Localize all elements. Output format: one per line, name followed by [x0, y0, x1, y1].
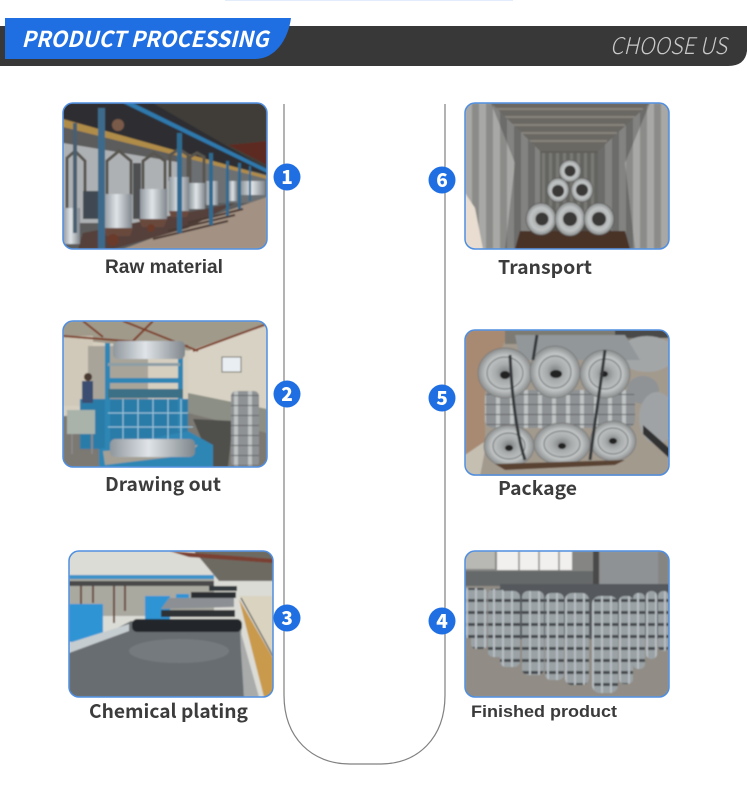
- header banner: [0, 18, 747, 66]
- label: chemical plating: Chemical plating: [89, 697, 249, 724]
- step badge 2: 2: [281, 380, 293, 407]
- step badge 4: [428, 607, 456, 634]
- step badge 3: 3: [281, 604, 293, 631]
- dark header bar: [0, 26, 747, 66]
- plating bath: [69, 621, 244, 697]
- label: package: Package: [498, 474, 577, 501]
- label: transport: Transport: [498, 253, 592, 280]
- process connector line: [284, 104, 445, 764]
- top accent strip: [225, 0, 513, 1]
- step badge 5: [428, 384, 456, 412]
- step badge 1: 1: [281, 163, 293, 190]
- straps: [510, 335, 605, 460]
- control box: [67, 410, 95, 434]
- standing roll: [231, 391, 259, 467]
- step badge 2: [274, 380, 300, 408]
- label: drawing out: Drawing out: [105, 470, 221, 497]
- step badge 1: [274, 163, 300, 190]
- step badge 4: 4: [436, 607, 448, 634]
- coil stack: [526, 160, 614, 236]
- panel: raw material photo: [63, 103, 267, 249]
- orange walkway: [239, 599, 273, 697]
- blue machine: [80, 399, 188, 449]
- step badge 5: 5: [436, 384, 448, 411]
- panel: finished product photo: [465, 551, 669, 697]
- right pallet rolls: [626, 335, 668, 372]
- coil hangers: [67, 149, 204, 213]
- blue columns: [98, 108, 105, 249]
- top and bottom rolls of mesh: [113, 341, 185, 359]
- roll stack: [515, 335, 640, 360]
- step badge 6: [428, 166, 456, 194]
- subtitle: CHOOSE US: [610, 27, 729, 61]
- panel: drawing out photo: [63, 321, 267, 467]
- label: finished product: Finished product: [471, 702, 617, 721]
- title: PRODUCT PROCESSING: [22, 22, 271, 54]
- panel: transport photo: [465, 103, 669, 249]
- label: raw material: Raw material: [105, 257, 223, 278]
- blue title tab: [5, 18, 291, 59]
- worker: [82, 381, 93, 403]
- step badge 3: [274, 604, 300, 632]
- step badge 6: 6: [436, 166, 448, 193]
- panel: chemical plating photo: [69, 551, 273, 697]
- rows of rolls: [500, 584, 669, 639]
- wire coils: [104, 194, 132, 228]
- panel: package photo: [465, 330, 675, 476]
